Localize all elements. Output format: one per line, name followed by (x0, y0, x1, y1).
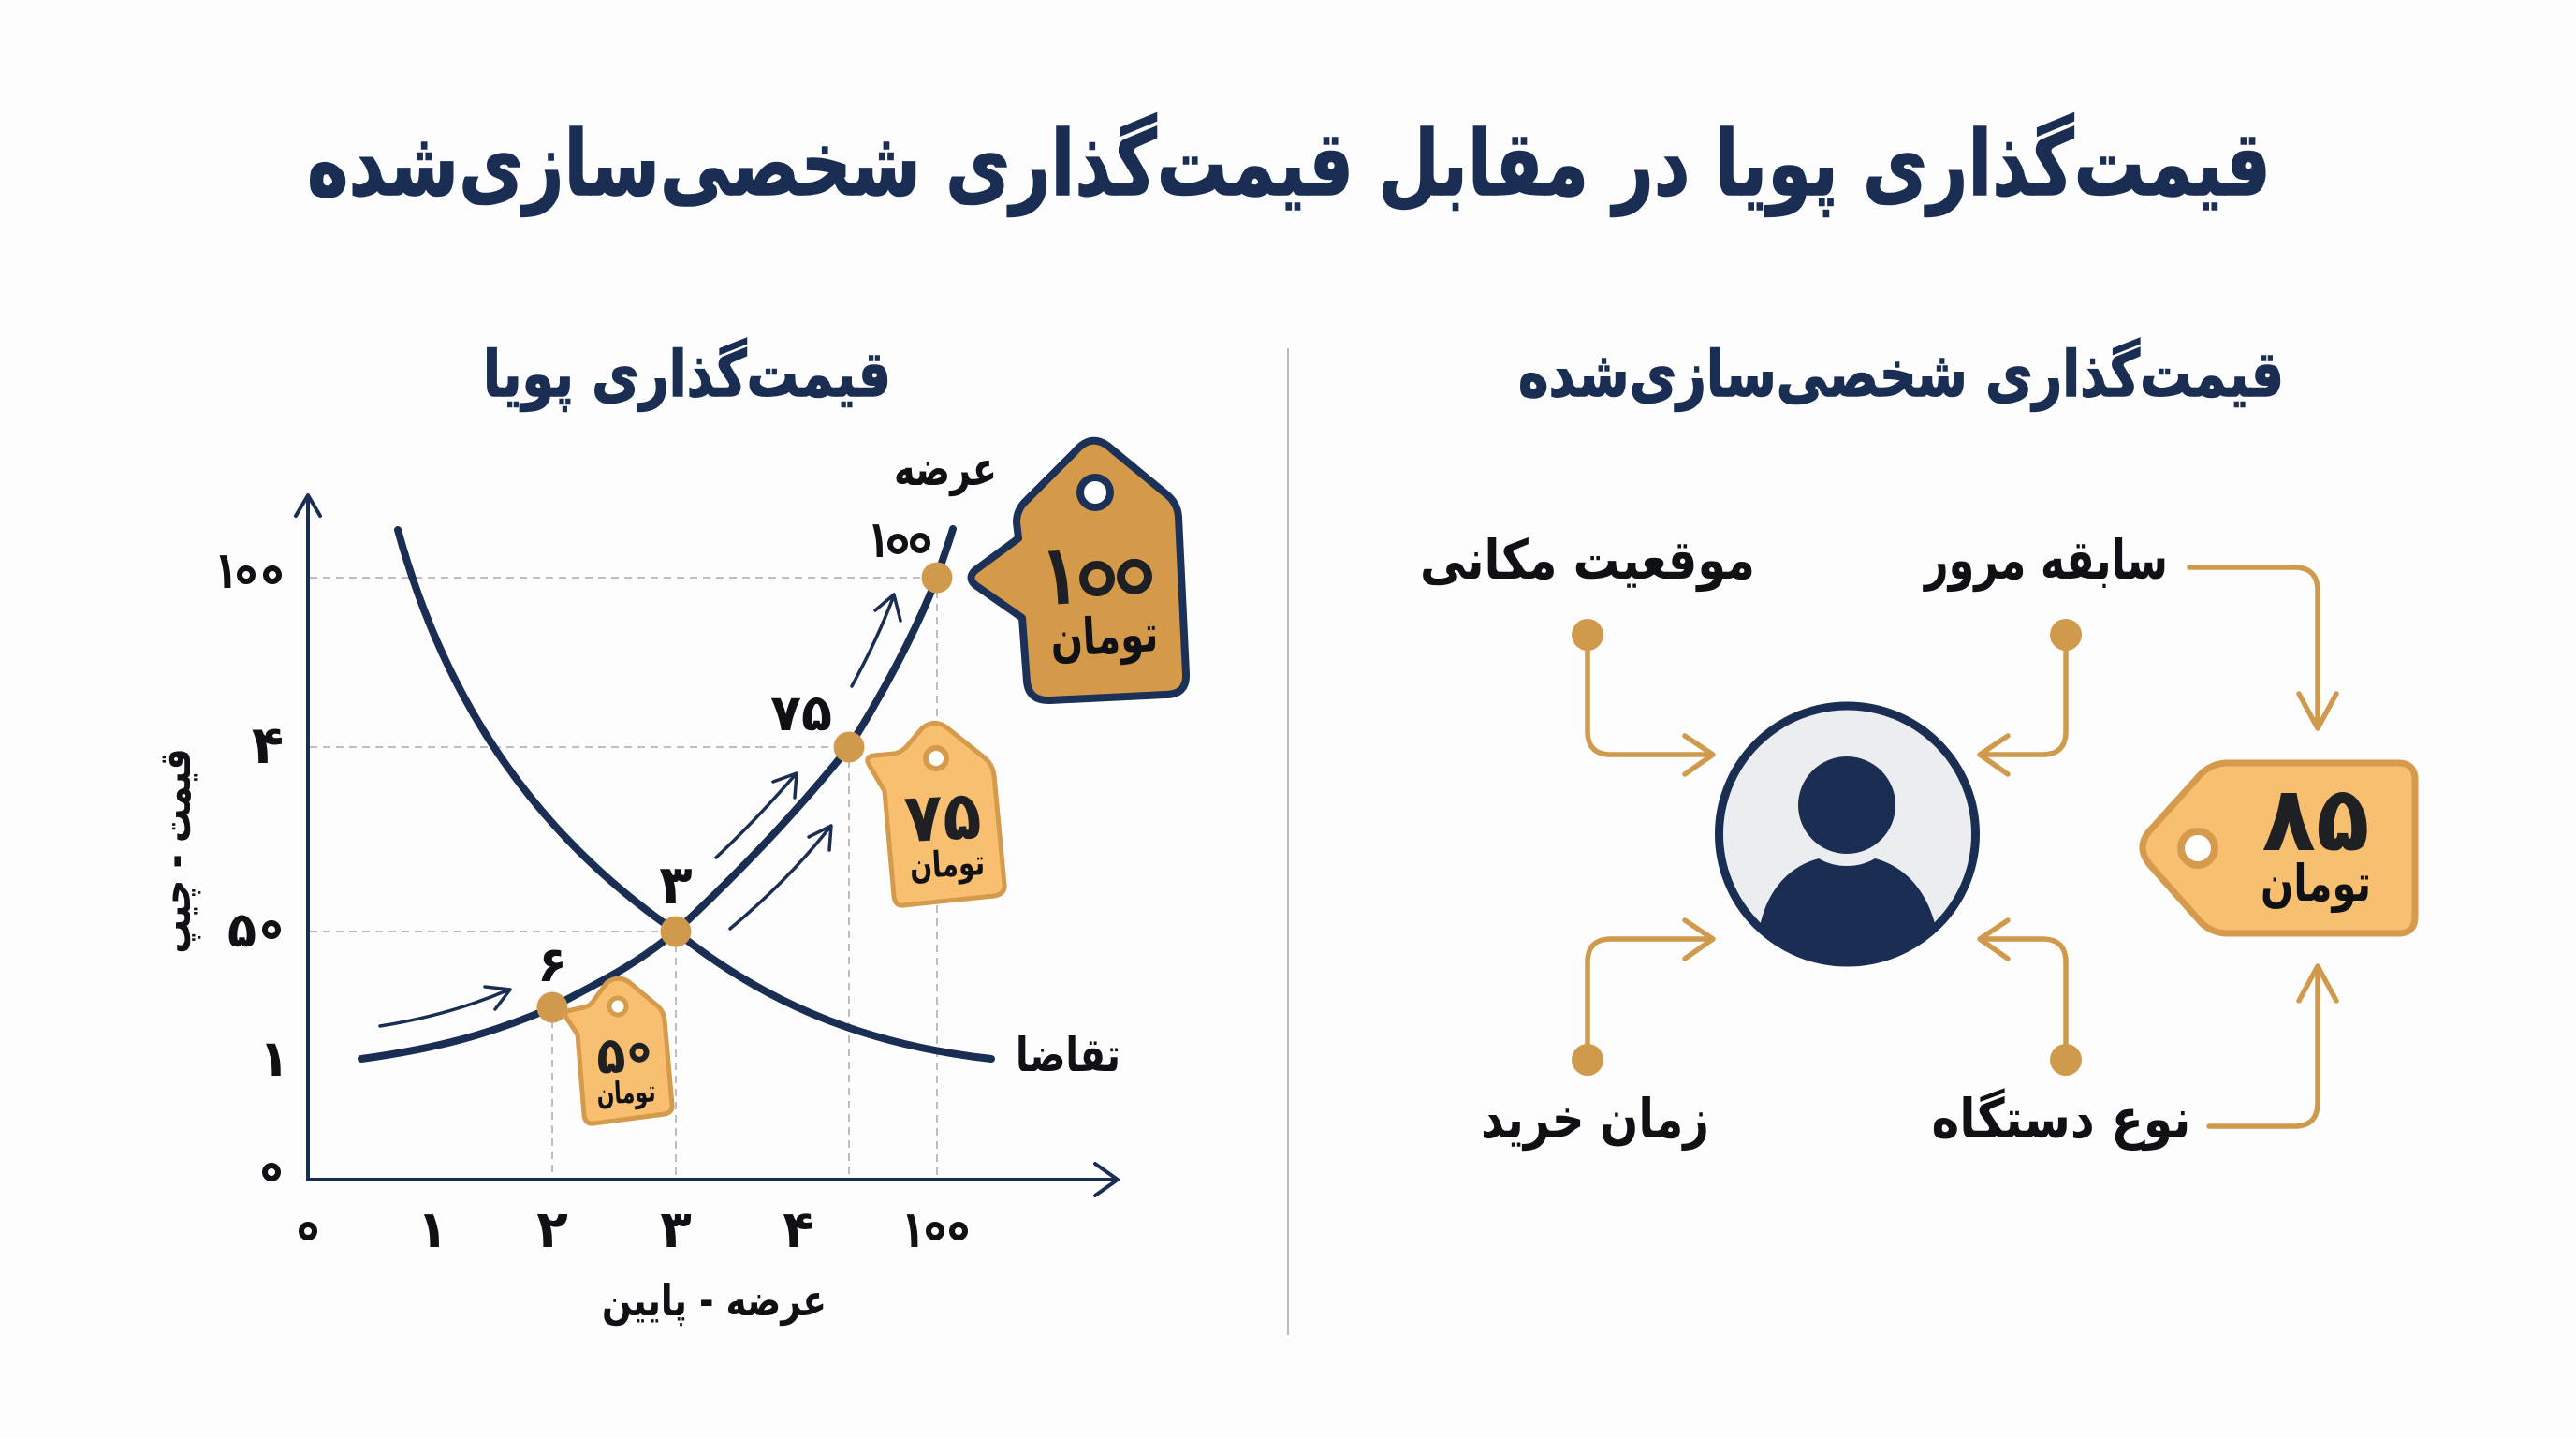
demand curve (398, 530, 991, 1059)
x axis tick labels: ۴ (783, 1199, 814, 1259)
y axis tick labels: ۵۰ (227, 902, 285, 959)
chart labels: عرضه (894, 442, 997, 497)
label: browsing history: سابقه مرور (1923, 528, 2168, 593)
label: device type: نوع دستگاه (1932, 1087, 2190, 1152)
price tag 50: تومان (595, 1073, 656, 1112)
label: location: موقعیت مکانی (1420, 528, 1755, 593)
price tag 85: تومان (2261, 854, 2371, 913)
price tag 85: ۸۵ (2261, 767, 2370, 872)
heading: dynamic pricing: قیمت‌گذاری پویا (483, 338, 891, 412)
chart labels: ۳ (659, 853, 693, 917)
x axis tick labels (296, 1199, 971, 1259)
x axis title: عرضه - پایین (602, 1275, 827, 1327)
price tag 75 (868, 723, 1004, 905)
price tag 100: ۱۰۰ (1038, 521, 1155, 625)
point dots (537, 562, 953, 1022)
x axis tick labels: ۳ (660, 1199, 692, 1259)
chart labels (537, 442, 1120, 1082)
panel: personalized pricing diagram (1420, 528, 2415, 1152)
y axis tick labels: ۰ (259, 1146, 284, 1194)
price tag 100 (972, 441, 1186, 700)
panel: dynamic pricing chart (150, 441, 1186, 1327)
x axis tick labels: ۱ (417, 1199, 448, 1259)
price tag 75: ۷۵ (902, 775, 983, 858)
x axis tick labels: ۰ (296, 1205, 320, 1253)
heading: personalized pricing: قیمت‌گذاری شخصی‌سازی‌شده (1518, 338, 2284, 412)
connector arrows into avatar (1588, 635, 2066, 1060)
y axis tick labels (214, 540, 289, 1194)
user avatar (1719, 706, 1975, 974)
movement arrows (380, 594, 900, 1026)
x axis tick labels: ۱۰۰ (901, 1199, 971, 1259)
y axis tick labels: ۱۰۰ (214, 540, 284, 600)
price tag 75: تومان (909, 842, 986, 887)
x axis tick labels: ۲ (536, 1199, 568, 1259)
chart labels: ۷۵ (770, 683, 832, 742)
price tag 85 (2143, 763, 2415, 933)
label: purchase time: زمان خرید (1481, 1087, 1709, 1152)
supply curve (361, 529, 953, 1059)
price tag 50 (565, 978, 672, 1123)
chart axes (296, 495, 1118, 1196)
price tag 50: ۵۰ (594, 1023, 656, 1086)
chart labels: تقاضا (1016, 1028, 1120, 1082)
connector arrows into price tag (2189, 567, 2336, 1126)
chart labels: ۱۰۰ (868, 509, 931, 569)
y axis title: قیمت - چیپ (150, 749, 201, 953)
y axis tick labels: ۴ (252, 715, 284, 776)
chart labels: ۶ (537, 937, 567, 993)
y axis tick labels: ۱ (259, 1029, 289, 1088)
connector dots (1572, 619, 2082, 1076)
price tag 100: تومان (1049, 604, 1160, 668)
